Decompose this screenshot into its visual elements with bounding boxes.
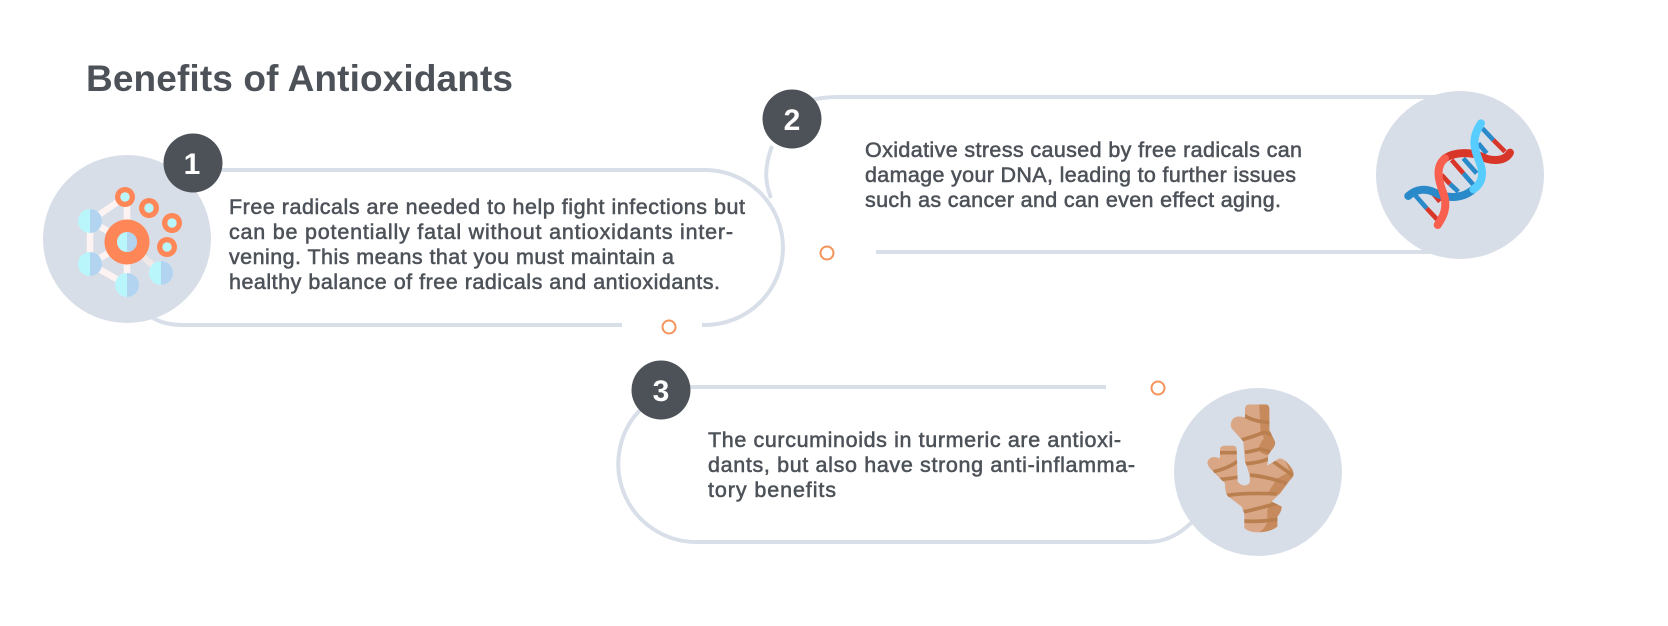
panel 1 marker — [662, 320, 676, 334]
panel 1 outline — [153, 170, 783, 325]
panel 2 icon circle — [1376, 91, 1544, 259]
badge 2 — [762, 90, 822, 148]
badge 3: 3 — [653, 375, 669, 408]
panel 2 text — [865, 138, 1302, 212]
panel 3 outline — [618, 387, 1192, 542]
badge 1: 1 — [184, 148, 200, 181]
panel 3 text: dants, but also have strong anti-inflamma- — [708, 453, 1135, 477]
panel 2 text: damage your DNA, leading to further issues — [865, 163, 1296, 187]
badge 1 — [164, 134, 222, 192]
panel 1 text: healthy balance of free radicals and antioxidants. — [229, 270, 720, 294]
panel 1 text: Free radicals are needed to help fight infections but — [229, 195, 745, 219]
panel 2 text: such as cancer and can even effect aging. — [865, 188, 1281, 212]
panel 3 marker — [1152, 382, 1164, 394]
panel 3: turmeric — [618, 360, 1342, 556]
icon: molecule — [78, 187, 182, 297]
icon: DNA helix — [1408, 123, 1510, 225]
panel 1 text: can be potentially fatal without antioxidants inter- — [229, 220, 733, 244]
panel 3 text — [708, 428, 1135, 502]
panel 2 text: Oxidative stress caused by free radicals can — [865, 138, 1302, 162]
title: Benefits of Antioxidants — [86, 58, 513, 99]
panel 2 marker — [820, 246, 834, 260]
panel 2: DNA damage — [762, 90, 1544, 260]
panel 3 text: The curcuminoids in turmeric are antioxi- — [708, 428, 1121, 452]
panel 3 icon circle — [1174, 388, 1342, 556]
icon: turmeric root — [1208, 404, 1294, 532]
panel 1 icon circle — [43, 155, 211, 323]
panel 1 text: vening. This means that you must maintain a — [229, 245, 674, 269]
panel 1 text — [229, 195, 745, 294]
panel 2 outline — [766, 97, 1440, 252]
badge 2: 2 — [784, 104, 800, 137]
panel 1: free radicals — [43, 134, 783, 334]
badge 3 — [632, 360, 690, 420]
panel 3 text: tory benefits — [708, 478, 836, 502]
